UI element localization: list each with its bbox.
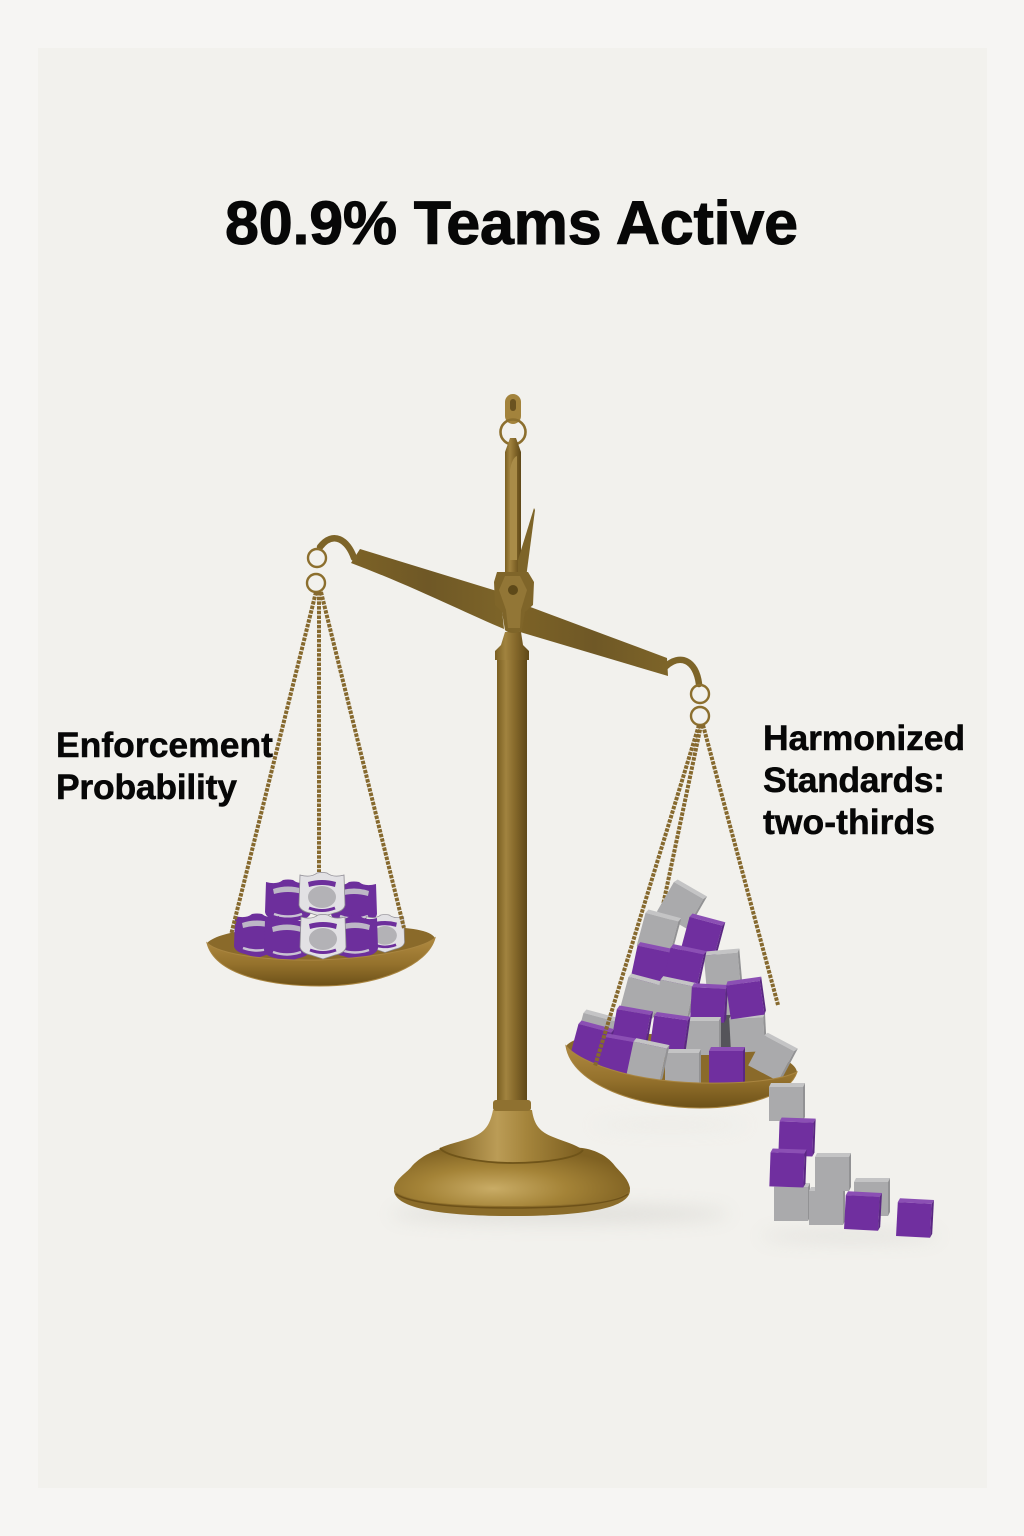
left pan bowl bbox=[207, 938, 435, 986]
base bbox=[394, 1100, 630, 1216]
soft shadows under the scale bbox=[390, 1120, 940, 1242]
label: harmonized standards bbox=[763, 718, 965, 842]
left hook bbox=[320, 538, 354, 558]
label: enforcement probability bbox=[56, 725, 273, 807]
balance beam bbox=[320, 538, 699, 684]
label: harmonized standards: two-thirds bbox=[763, 802, 935, 842]
scale stand bbox=[394, 394, 630, 1216]
column bbox=[497, 660, 527, 1102]
upper post bbox=[505, 438, 521, 585]
harmonized cube pile bbox=[570, 879, 798, 1087]
hanger rings: right bbox=[691, 685, 709, 725]
left pan back rim bbox=[207, 926, 435, 960]
spilled cubes bbox=[769, 1083, 934, 1238]
right pan bowl bbox=[566, 1046, 797, 1108]
right pan back rim bbox=[566, 1033, 797, 1083]
right chains, front bbox=[595, 725, 778, 1066]
label: harmonized standards: Harmonized bbox=[763, 718, 965, 758]
pivot plate bbox=[494, 572, 534, 633]
right chain, rear bbox=[663, 725, 701, 905]
left chains bbox=[231, 592, 404, 935]
icon: top loop and ring bbox=[500, 394, 526, 444]
left arm bbox=[351, 549, 504, 629]
label: enforcement probability: Enforcement bbox=[56, 725, 273, 765]
right arm bbox=[520, 605, 668, 676]
pivot pin bbox=[508, 585, 518, 595]
right hook bbox=[665, 660, 699, 684]
label: enforcement probability: Probability bbox=[56, 767, 237, 807]
enforcement badges bbox=[234, 872, 405, 962]
label: harmonized standards: Standards: bbox=[763, 760, 945, 800]
hanger rings: left bbox=[307, 549, 326, 592]
title: 80.9% Teams Active bbox=[225, 189, 798, 257]
pointer needle bbox=[518, 508, 535, 578]
column collar bbox=[495, 632, 529, 660]
